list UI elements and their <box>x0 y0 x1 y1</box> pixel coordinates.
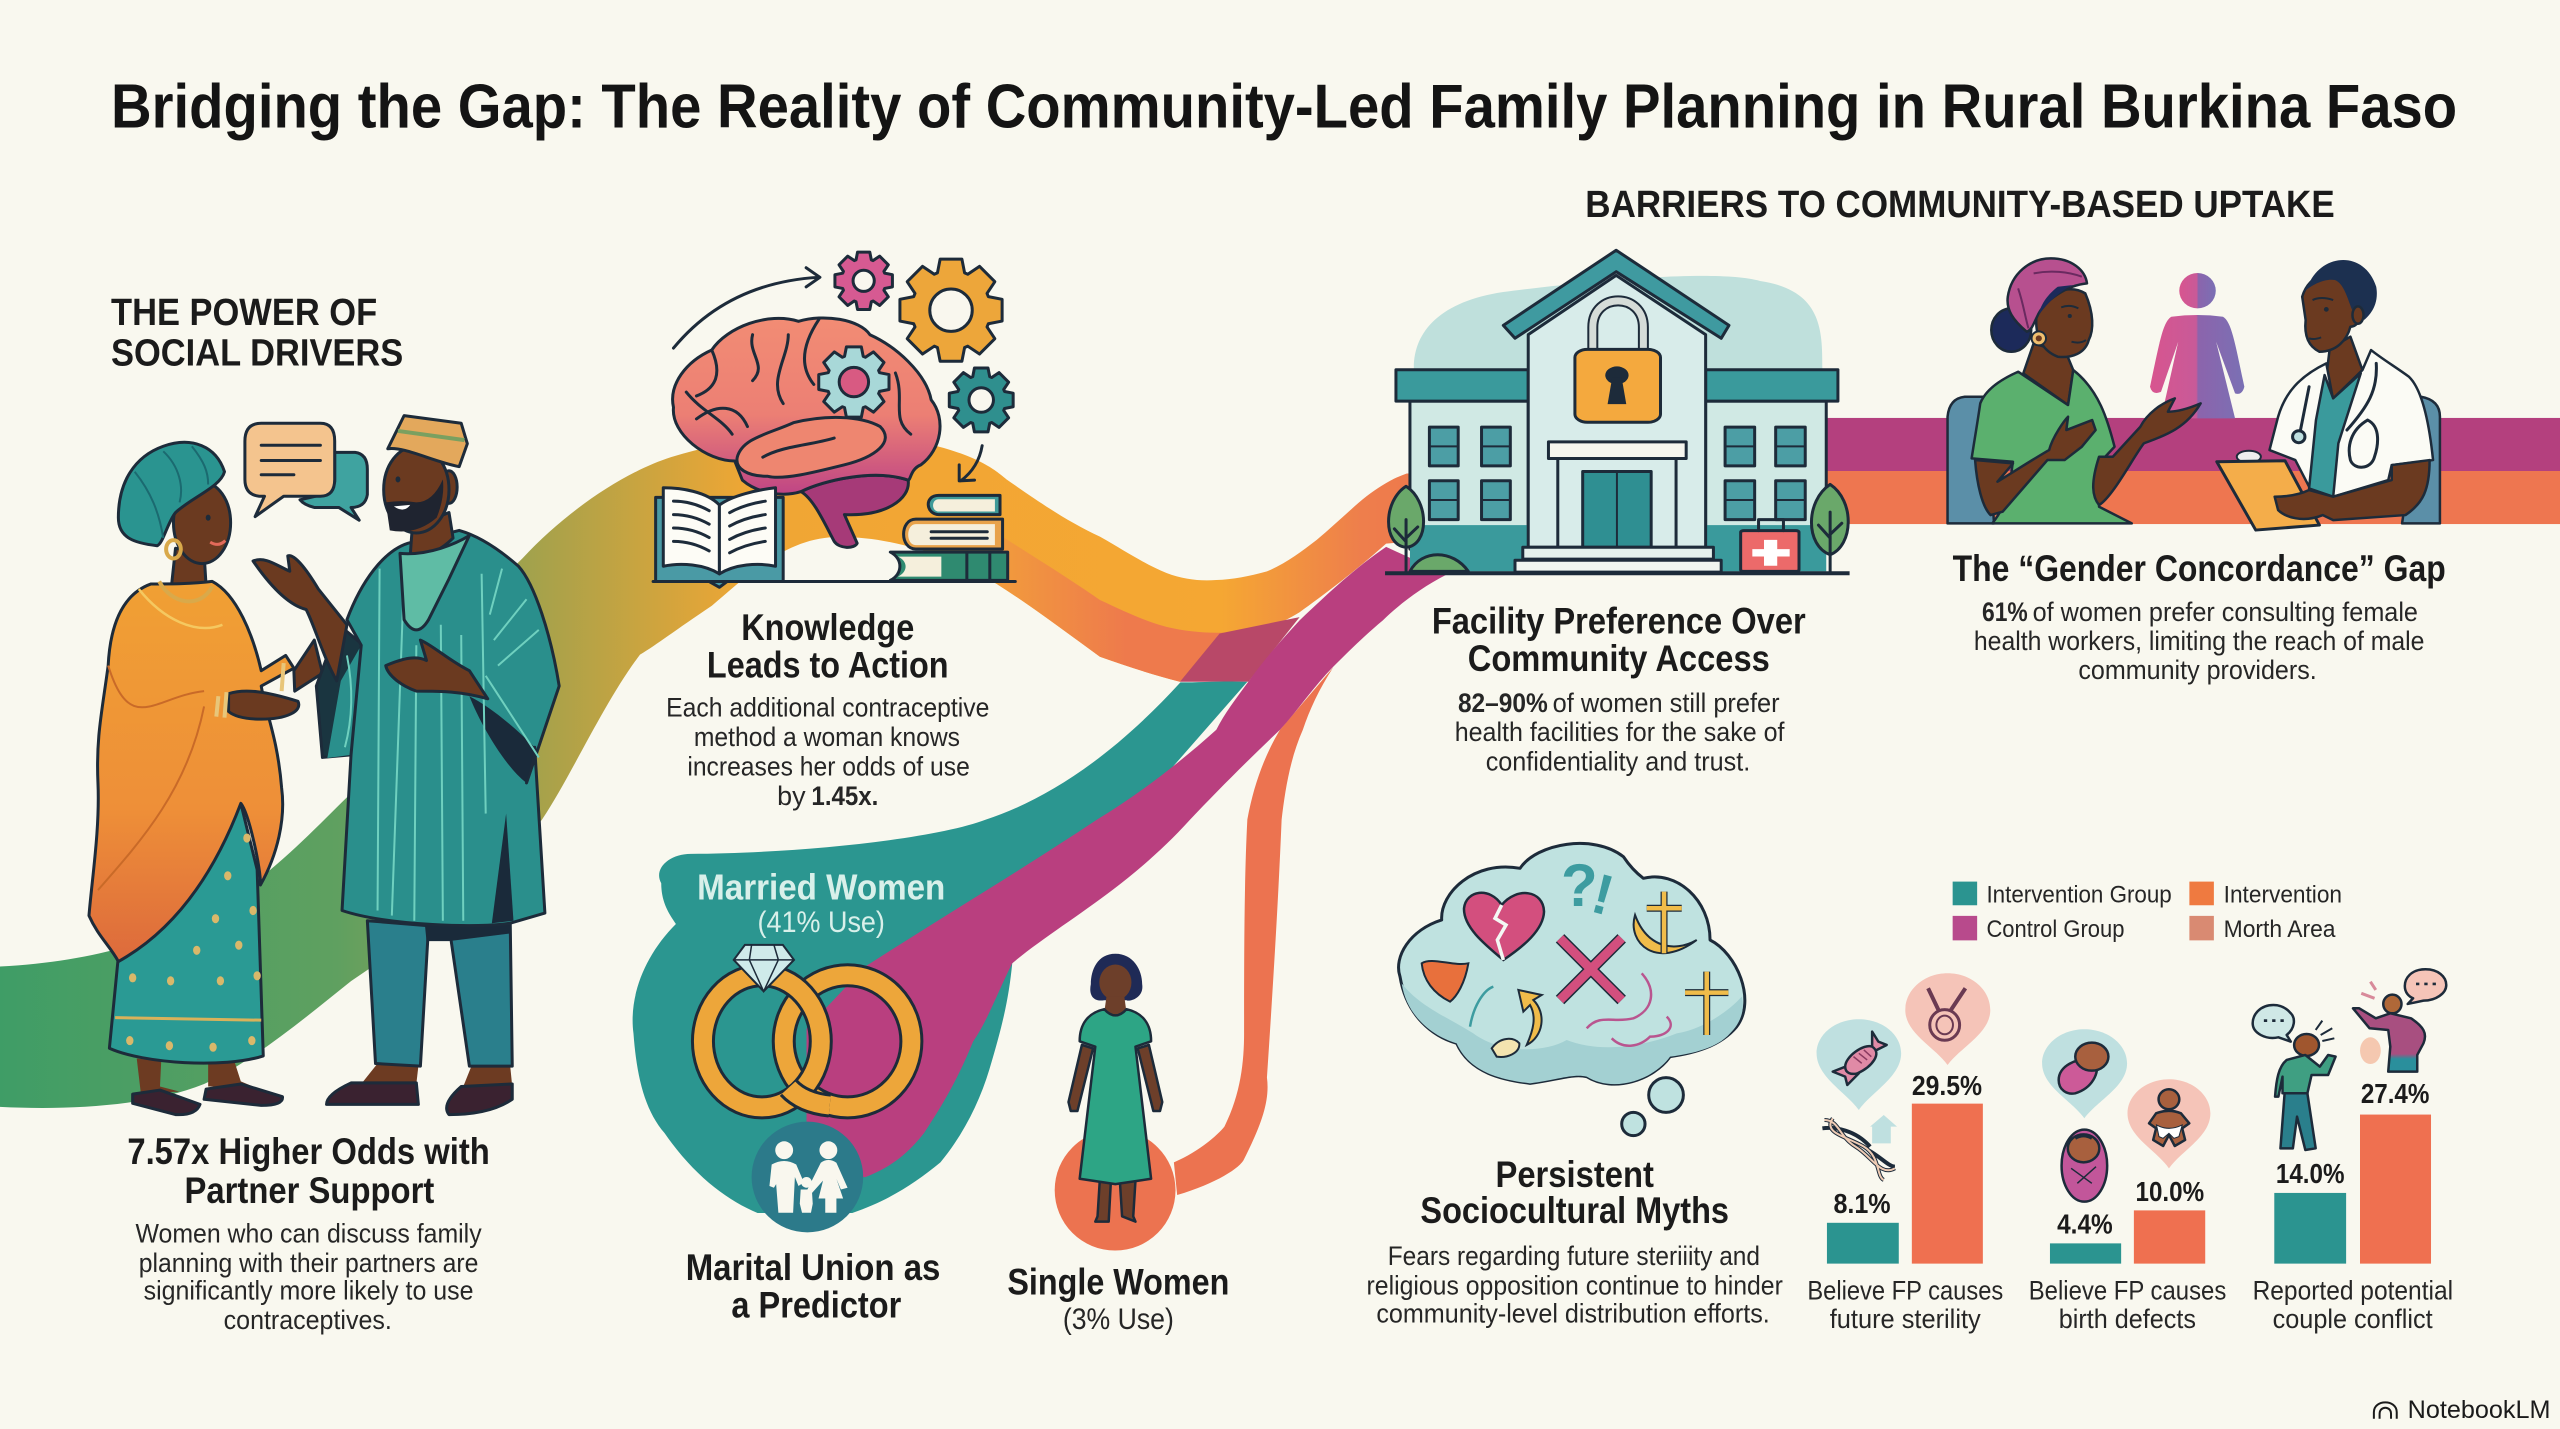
text: partner support <box>127 1131 490 1335</box>
text: knowledge: Each additional contraceptive <box>666 693 989 723</box>
flowing ribbons <box>0 418 2560 1251</box>
text: partner support: Women who can discuss family <box>136 1218 482 1248</box>
icon: sterility bubble <box>1905 973 1990 1065</box>
open book <box>656 488 783 587</box>
text: facility preference: confidentiality and trust. <box>1486 747 1750 777</box>
text: gender concordance: health workers, limiting the reach of male <box>1974 626 2424 656</box>
text: sociocultural myths: Fears regarding future steriiity and <box>1388 1241 1760 1271</box>
gears <box>835 252 1013 432</box>
bars: birth defects: birth defects <box>2059 1304 2196 1334</box>
text: sociocultural myths: community-level distribution efforts. <box>1376 1298 1770 1328</box>
illustration: consultation with doctor <box>1948 258 2440 530</box>
text: knowledge: by <box>777 781 806 811</box>
text: sociocultural myths: Persistent <box>1496 1154 1654 1195</box>
text: partner support: significantly more likely to use <box>144 1276 473 1306</box>
bars: couple conflict <box>2253 1078 2453 1334</box>
text: knowledge: 1.45x. <box>811 781 878 811</box>
married women label: Married Women <box>697 867 945 908</box>
NotebookLM watermark: NotebookLM <box>2408 1396 2551 1424</box>
chart legend: Intervention Group <box>1986 881 2172 908</box>
text: knowledge: Knowledge <box>741 607 914 648</box>
bars: couple conflict: 27.4% <box>2361 1078 2429 1109</box>
bars: birth defects: Believe FP causes <box>2029 1276 2226 1306</box>
section heading: social drivers: THE POWER OF <box>111 291 377 333</box>
bars: future sterility: 29.5% <box>1912 1070 1982 1101</box>
man figure <box>253 416 559 1115</box>
bars: future sterility: Believe FP causes <box>1807 1276 2003 1306</box>
chart legend: Control Group <box>1986 916 2124 943</box>
question and exclamation marks: ! <box>1585 862 1620 928</box>
trees and first-aid kit <box>1385 484 1850 573</box>
brain <box>673 318 940 547</box>
text: gender concordance: 61% <box>1982 597 2028 627</box>
red cross-out <box>1560 938 1622 1000</box>
small myth glyphs <box>1422 961 1671 1057</box>
text: facility preference: health facilities for the sake of <box>1455 717 1785 747</box>
bars: future sterility: future sterility <box>1830 1304 1981 1334</box>
bars: couple conflict: couple conflict <box>2273 1304 2433 1334</box>
icon: newborn bubble <box>2042 1029 2127 1202</box>
text: facility preference <box>1432 600 1806 777</box>
illustration: thought cloud of myths <box>1399 843 1745 1136</box>
text: marital union: Marital Union as <box>686 1247 940 1288</box>
text: partner support: planning with their partners are <box>139 1248 478 1278</box>
icon: couple arguing <box>2253 969 2446 1150</box>
heading: barriers: BARRIERS TO COMMUNITY-BASED UPTAKE <box>1585 183 2335 225</box>
speech bubbles <box>245 423 367 520</box>
text: gender concordance: community providers. <box>2078 655 2317 685</box>
illustration: health facility with padlock <box>1385 250 1850 573</box>
question and exclamation marks: ? <box>1561 852 1598 919</box>
woman figure <box>89 442 322 1115</box>
icon: DNA bubble <box>1817 1019 1901 1180</box>
wedding rings <box>703 945 911 1107</box>
chart legend: Morth Area <box>2224 916 2336 943</box>
bars: future sterility: 8.1% <box>1833 1188 1891 1219</box>
illustration: brain, gears and books <box>653 252 1015 587</box>
text: sociocultural myths <box>1367 1154 1783 1328</box>
bars: birth defects <box>2029 1176 2226 1334</box>
doctor <box>2217 260 2433 530</box>
married women label <box>697 867 945 939</box>
text: knowledge: method a woman knows <box>694 722 960 752</box>
text: facility preference: Community Access <box>1468 638 1770 679</box>
bars: couple conflict: Reported potential <box>2253 1276 2453 1306</box>
chart icons <box>1817 969 2446 1202</box>
arrows <box>673 268 982 481</box>
bars: birth defects: 10.0% <box>2136 1176 2204 1207</box>
text: knowledge <box>666 607 989 811</box>
text: gender concordance: The “Gender Concordance” Gap <box>1953 548 2446 589</box>
broken heart <box>1464 893 1544 960</box>
patient <box>1972 258 2201 523</box>
padlock <box>1575 301 1661 422</box>
text: gender concordance: of women prefer consulting female <box>2033 597 2418 627</box>
text: gender concordance <box>1953 548 2446 685</box>
text: knowledge: increases her odds of use <box>687 751 970 781</box>
text: facility preference: Facility Preference Over <box>1432 600 1806 641</box>
married women label: (41% Use) <box>758 906 885 939</box>
text: sociocultural myths: Sociocultural Myths <box>1420 1190 1729 1231</box>
text: single women: Single Women <box>1007 1262 1229 1303</box>
section heading: social drivers <box>111 291 403 374</box>
bars: birth defects: 4.4% <box>2057 1209 2113 1240</box>
illustration: single woman <box>1069 954 1162 1222</box>
text: partner support: Partner Support <box>184 1170 434 1211</box>
gender symbol figure <box>2150 273 2244 418</box>
illustration: couple talking <box>89 416 559 1115</box>
text: marital union: a Predictor <box>731 1284 901 1325</box>
family icon <box>752 1122 863 1232</box>
text: facility preference: 82–90% <box>1458 688 1548 718</box>
text: knowledge: Leads to Action <box>707 645 949 686</box>
religious symbols <box>1634 892 1728 1035</box>
bar chart: myths by group <box>1807 1070 2453 1334</box>
icon: infant bubble <box>2127 1079 2210 1168</box>
text: single women <box>1007 1262 1229 1336</box>
chart legend: Intervention <box>2224 881 2342 908</box>
text: single women: (3% Use) <box>1063 1303 1174 1336</box>
bars: future sterility <box>1807 1070 2003 1334</box>
text: facility preference: of women still prefer <box>1553 688 1780 718</box>
section heading: social drivers: SOCIAL DRIVERS <box>111 332 403 374</box>
text: sociocultural myths: religious opposition continue to hinder <box>1367 1271 1783 1301</box>
text: partner support: 7.57x Higher Odds with <box>127 1131 490 1172</box>
book stack <box>653 495 1015 582</box>
chart legend <box>1953 881 2342 943</box>
illustration: rings and family <box>703 945 911 1232</box>
text: marital union <box>686 1247 940 1325</box>
text: partner support: contraceptives. <box>224 1305 392 1335</box>
bars: couple conflict: 14.0% <box>2276 1158 2344 1189</box>
question and exclamation marks <box>1561 852 1620 928</box>
